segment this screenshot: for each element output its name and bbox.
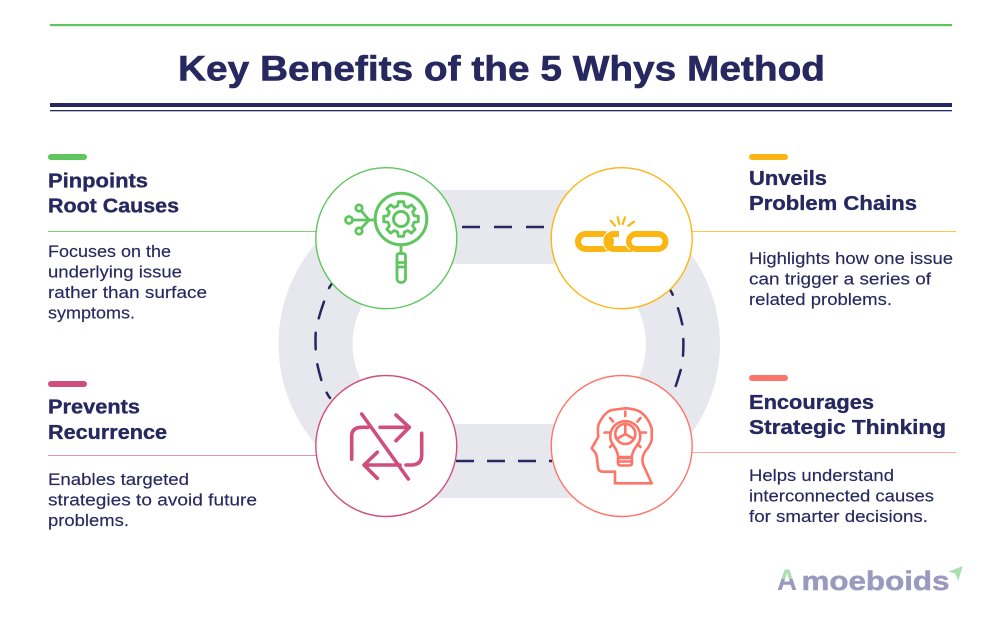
text: prevents description: problems. (48, 511, 129, 530)
panel: prevents recurrence (48, 381, 316, 530)
text: prevents description: strategies to avoid future (48, 490, 257, 510)
heading: prevents recurrence: Prevents (48, 396, 140, 418)
icon: crossed repeat arrows in pink circle (316, 376, 457, 516)
text: encourages description: for smarter decisions. (749, 507, 928, 526)
loop track with dashed path (316, 227, 683, 461)
heading: unveils problem chains: Unveils (749, 168, 827, 190)
icon: head with light bulb in coral circle (551, 376, 692, 516)
text: pinpoints description: symptoms. (48, 304, 135, 322)
text: prevents description: Enables targeted (48, 470, 189, 489)
heading: prevents recurrence: Recurrence (48, 422, 167, 444)
panel: unveils problem chains (692, 154, 956, 309)
header rules and title (50, 24, 952, 111)
heading: unveils problem chains: Problem Chains (749, 193, 917, 215)
text: pinpoints description: rather than surface (48, 283, 207, 302)
heading: pinpoints root causes: Pinpoints (48, 170, 148, 192)
logo: Amoeboids: moeboids (802, 566, 950, 596)
icon: broken chain in yellow circle (551, 168, 692, 309)
logo: Amoeboids: A (777, 564, 797, 597)
heading: pinpoints root causes: Root Causes (48, 196, 179, 218)
heading: encourages strategic thinking: Encourages (749, 392, 874, 414)
text: encourages description: Helps understand (749, 466, 894, 485)
icon: logo arrow (948, 566, 963, 581)
text: pinpoints description: underlying issue (48, 262, 182, 282)
text: unveils description: related problems. (749, 290, 892, 309)
logo: Amoeboids (777, 564, 963, 597)
text: unveils description: Highlights how one issue (749, 249, 953, 268)
text: unveils description: can trigger a series of (749, 270, 931, 288)
text: pinpoints description: Focuses on the (48, 242, 171, 261)
heading: encourages strategic thinking: Strategic Thinking (749, 417, 946, 439)
panel: encourages strategic thinking (692, 375, 956, 526)
text: encourages description: interconnected causes (749, 486, 934, 506)
title: Key Benefits of the 5 Whys Method (178, 50, 825, 88)
icon: magnifier with gear in green circle (316, 168, 457, 309)
panel: pinpoints root causes (48, 154, 316, 322)
